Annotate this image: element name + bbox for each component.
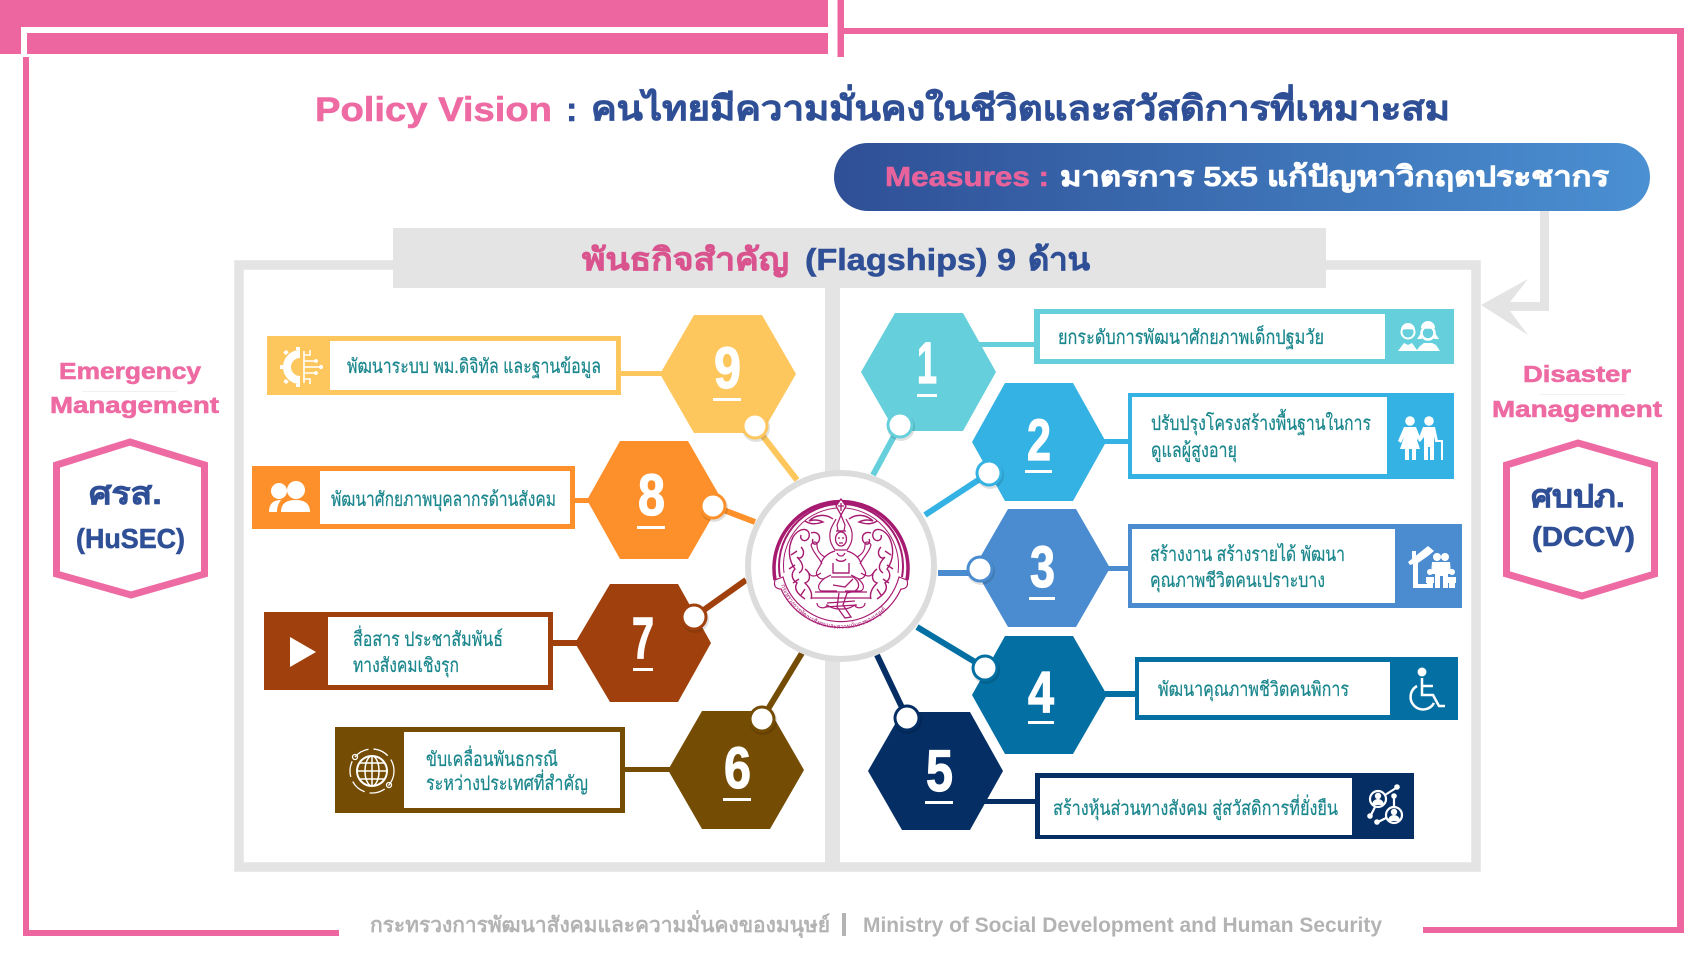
measures pill xyxy=(834,143,1650,211)
item 3: vulnerable people: 3 xyxy=(1030,535,1055,600)
flagships heading: พันธกิจสำคัญ xyxy=(582,242,789,278)
icon: elderly couple xyxy=(1398,416,1443,460)
right label: disaster management: Management xyxy=(1492,396,1662,422)
left hexagon: HuSEC: (HuSEC) xyxy=(76,523,185,554)
measures pill: มาตรการ 5x5 แก้ปัญหาวิกฤตประชากร xyxy=(1060,161,1609,193)
item 9: digital systems xyxy=(267,315,796,442)
icon: gear circuit xyxy=(280,347,323,387)
item 1: early childhood: ยกระดับการพัฒนาศักยภาพเด็กปฐมวัย xyxy=(1058,324,1324,349)
right hexagon: DCCV: (DCCV) xyxy=(1532,521,1635,552)
left hexagon: HuSEC xyxy=(56,442,204,595)
item 2: elderly care: ปรับปรุงโครงสร้างพื้นฐานในการ xyxy=(1151,409,1371,436)
item 5: social partnership xyxy=(868,704,1414,839)
left hexagon: HuSEC: ศรส. xyxy=(89,476,162,511)
item 1: early childhood xyxy=(861,309,1454,441)
item 3: vulnerable people: สร้างงาน สร้างรายได้ พัฒนา xyxy=(1150,543,1345,566)
centre seal: กระทรวงการพัฒนาสังคมและความมั่นคงของมนุษย์ xyxy=(781,584,886,629)
title: policy vision: Policy Vision xyxy=(315,91,552,129)
centre seal xyxy=(745,470,937,662)
measures pill: Measures : xyxy=(885,161,1049,192)
item 8: social personnel: พัฒนาศักยภาพบุคลากรด้านสังคม xyxy=(331,489,556,512)
item 6: international obligations: 6 xyxy=(724,736,751,801)
icon: family and house xyxy=(1408,546,1456,588)
item 3: vulnerable people: คุณภาพชีวิตคนเปราะบาง xyxy=(1150,570,1325,593)
footer: กระทรวงการพัฒนาสังคมและความมั่นคงของมนุษย์ xyxy=(370,909,830,939)
connector lines to centre xyxy=(694,425,989,719)
item 6: international obligations xyxy=(335,706,804,829)
item 2: elderly care: ดูแลผู้สูงอายุ xyxy=(1151,440,1237,463)
icon: wheelchair xyxy=(1411,669,1445,709)
right label: disaster management: Disaster xyxy=(1523,361,1631,387)
item 3: vulnerable people xyxy=(966,509,1462,627)
left label: emergency management: Emergency xyxy=(59,358,201,384)
ornaments left half xyxy=(789,515,849,609)
item 7: communication: สื่อสาร ประชาสัมพันธ์ xyxy=(353,625,503,651)
title: policy vision: คนไทยมีความมั่นคงในชีวิตและสวัสดิการที่เหมาะสม xyxy=(591,84,1450,128)
right hexagon: DCCV: ศบปภ. xyxy=(1531,479,1625,514)
item 7: communication xyxy=(264,584,711,702)
arrow from measures to flagships xyxy=(1481,211,1549,335)
item 8: social personnel: 8 xyxy=(638,463,665,528)
right label: disaster management xyxy=(1492,361,1662,422)
icon: people xyxy=(269,481,310,512)
item 5: social partnership: 5 xyxy=(926,739,953,804)
item 6: international obligations: ระหว่างประเทศที่สำคัญ xyxy=(426,769,588,795)
icon: children xyxy=(1398,321,1440,351)
item 7: communication: 7 xyxy=(632,606,654,671)
item 2: elderly care xyxy=(972,383,1454,501)
item 2: elderly care: 2 xyxy=(1027,408,1051,473)
item 7: communication: ทางสังคมเชิงรุก xyxy=(353,655,459,678)
item 9: digital systems: 9 xyxy=(714,336,741,401)
icon: play xyxy=(290,637,316,667)
footer: Ministry of Social Development and Human Security xyxy=(863,914,1382,937)
item 4: persons with disabilities: พัฒนาคุณภาพชีวิตคนพิการ xyxy=(1158,679,1349,702)
left label: emergency management: Management xyxy=(50,392,219,418)
title: policy vision xyxy=(315,84,1450,129)
footer xyxy=(370,909,1382,939)
item 1: early childhood: 1 xyxy=(917,331,937,396)
item 4: persons with disabilities: 4 xyxy=(1028,660,1054,725)
right hexagon: DCCV xyxy=(1506,443,1654,596)
flagships heading xyxy=(393,228,1326,288)
flagships heading: (Flagships) 9 xyxy=(805,242,1016,277)
item 4: persons with disabilities xyxy=(972,636,1458,754)
flagships heading: ด้าน xyxy=(1028,242,1090,277)
item 5: social partnership: สร้างหุ้นส่วนทางสังคม สู่สวัสดิการที่ยั่งยืน xyxy=(1053,794,1338,821)
item 9: digital systems: พัฒนาระบบ พม.ดิจิทัล และฐานข้อมูล xyxy=(347,356,601,379)
icon: globe xyxy=(350,749,394,793)
item 6: international obligations: ขับเคลื่อนพันธกรณี xyxy=(426,745,558,771)
flagships panel frame xyxy=(239,265,1476,867)
icon: network of people xyxy=(1367,784,1402,825)
item 8: social personnel xyxy=(252,441,728,559)
left label: emergency management xyxy=(50,358,219,418)
title: policy vision: : xyxy=(566,91,577,129)
